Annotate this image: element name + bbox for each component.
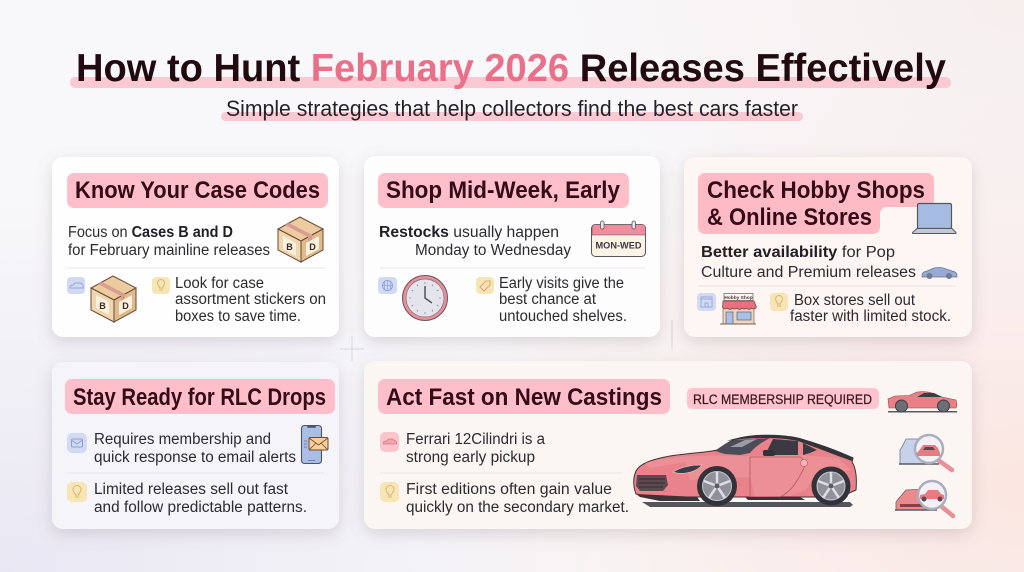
text: look for case stickers: Look for case bbox=[175, 275, 264, 292]
panel: shop mid-week bbox=[364, 156, 660, 337]
heading: know your case codes: Know Your Case Codes bbox=[75, 177, 320, 204]
icon: bulb tile bbox=[67, 482, 87, 502]
text: ferrari: Ferrari 12Cilindri is a bbox=[406, 431, 545, 448]
text: first editions: First editions often gain value bbox=[406, 481, 612, 498]
panel: hobby shops and online stores bbox=[684, 157, 972, 337]
icon: phone with envelope bbox=[302, 426, 328, 464]
text: requires membership: quick response to email alerts bbox=[94, 449, 296, 466]
badge: rlc membership required bbox=[687, 388, 879, 409]
panel: stay ready for rlc drops bbox=[52, 362, 339, 529]
heading: stay ready: Stay Ready for RLC Drops bbox=[73, 384, 326, 411]
heading: check hobby shops bbox=[698, 173, 934, 234]
text: focus on cases: for February mainline releases bbox=[68, 242, 270, 259]
text: box stores: faster with limited stock. bbox=[790, 308, 951, 325]
icon: tag tile bbox=[476, 277, 494, 294]
text: box stores bbox=[790, 292, 951, 325]
text: look for case stickers bbox=[175, 275, 326, 325]
text: restocks bbox=[379, 224, 571, 259]
text: better availability bbox=[701, 244, 916, 281]
text: early visits bbox=[499, 275, 627, 325]
title: How to Hunt February 2026 Releases Effectively bbox=[76, 47, 947, 90]
icon: case box large bbox=[278, 217, 323, 262]
text: better availability: Better availability for Pop bbox=[701, 244, 895, 261]
heading: check hobby shops: Check Hobby Shops bbox=[707, 177, 925, 204]
text: limited releases: and follow predictable patterns. bbox=[94, 499, 307, 516]
icon: small red car bbox=[888, 392, 957, 412]
icon: laptop bbox=[912, 204, 956, 234]
icon: blue car with magnifier bbox=[899, 435, 952, 470]
icon: case box small: D bbox=[122, 301, 129, 311]
icon: case box small bbox=[91, 276, 136, 322]
text: ferrari bbox=[406, 431, 545, 466]
heading: act fast: Act Fast on New Castings bbox=[386, 384, 662, 411]
icon: calendar: MON-WED bbox=[596, 240, 642, 252]
icon: clock bbox=[402, 276, 448, 320]
text: focus on cases bbox=[68, 224, 270, 259]
icon: mail tile bbox=[67, 433, 87, 453]
badge: rlc membership required: RLC MEMBERSHIP REQUIRED bbox=[693, 392, 872, 407]
text: focus on cases: Focus on Cases B and D bbox=[68, 224, 233, 241]
text: first editions bbox=[406, 481, 629, 516]
icon: globe tile bbox=[378, 277, 397, 294]
heading: stay ready bbox=[65, 379, 335, 414]
icon: blue car bbox=[922, 267, 957, 279]
text: early visits: Early visits give the bbox=[499, 275, 624, 292]
text: restocks: Monday to Wednesday bbox=[415, 242, 571, 259]
text: look for case stickers: assortment stickers on bbox=[175, 291, 326, 308]
icon: case box small: B bbox=[99, 301, 106, 311]
text: look for case stickers: boxes to save time. bbox=[175, 308, 301, 325]
text: ferrari: strong early pickup bbox=[406, 449, 535, 466]
icon: case box large: D bbox=[309, 242, 316, 252]
subtitle: Simple strategies that help collectors find the best cars faster bbox=[226, 96, 798, 121]
icon: red car with magnifier bbox=[895, 481, 953, 516]
icon: bulb tile bbox=[380, 482, 399, 502]
text: restocks: Restocks usually happen bbox=[379, 224, 559, 241]
heading: check hobby shops: & Online Stores bbox=[707, 204, 872, 231]
panel: act fast on new castings bbox=[364, 361, 972, 529]
icon: hobby shop bbox=[720, 294, 756, 324]
icon: calendar bbox=[592, 221, 646, 256]
icon: hobby shop: Hobby Shop bbox=[724, 295, 753, 301]
text: requires membership: Requires membership and bbox=[94, 431, 271, 448]
icon: car tile bbox=[67, 277, 85, 294]
text: better availability: Culture and Premium releases bbox=[701, 264, 916, 281]
icon: car row tile bbox=[380, 432, 399, 452]
panel: know your case codes bbox=[52, 157, 339, 337]
text: limited releases: Limited releases sell out fast bbox=[94, 481, 289, 498]
icon: large pink sports car bbox=[634, 435, 856, 507]
heading: shop mid-week: Shop Mid-Week, Early bbox=[386, 177, 621, 204]
text: requires membership bbox=[94, 431, 296, 466]
text: limited releases bbox=[94, 481, 307, 516]
text: first editions: quickly on the secondary market. bbox=[406, 499, 629, 516]
icon: case box large: B bbox=[286, 242, 293, 252]
text: box stores: Box stores sell out bbox=[794, 292, 916, 309]
icon: store tile bbox=[697, 293, 716, 311]
text: early visits: untouched shelves. bbox=[499, 308, 627, 325]
text: early visits: best chance at bbox=[499, 291, 597, 308]
icon: bulb tile bbox=[770, 293, 788, 311]
icon: bulb tile bbox=[152, 277, 170, 294]
